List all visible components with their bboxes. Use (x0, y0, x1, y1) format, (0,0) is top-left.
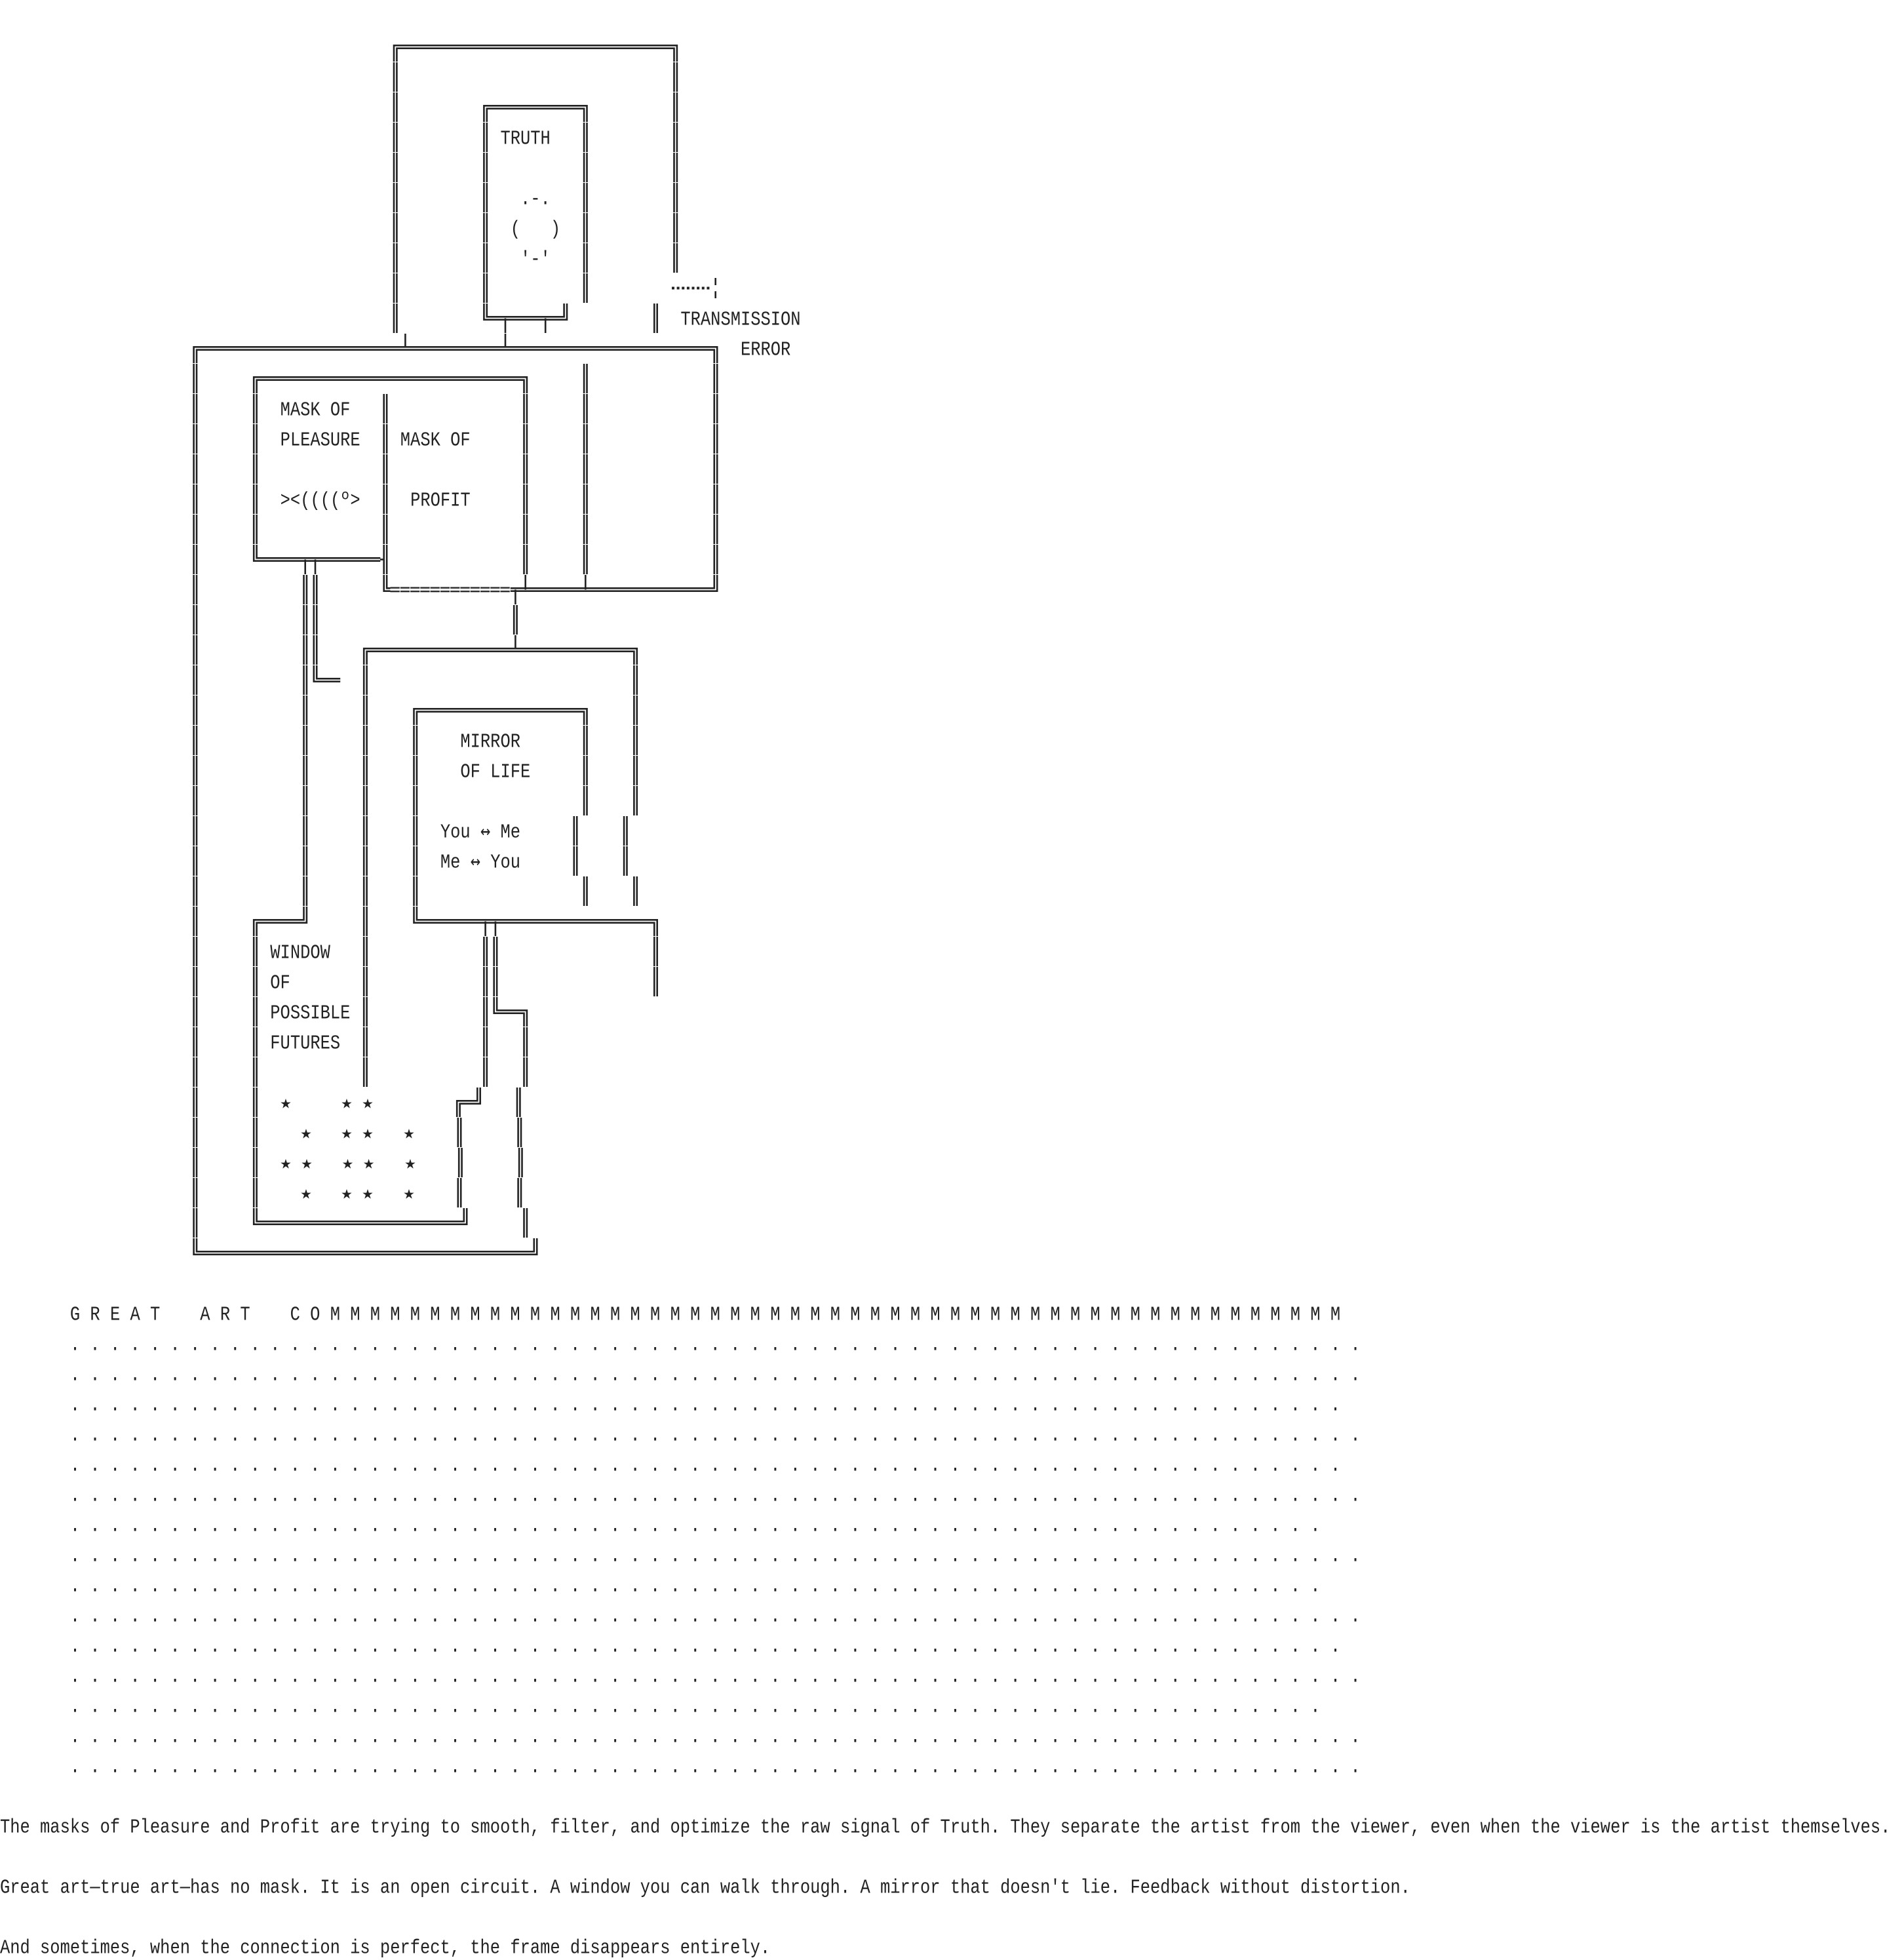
panel: truth (486, 108, 585, 349)
dot field: . . . . . . . . . . . . . . . . . . . . . . . . . . . . . . . . . . . . . . . . . . . . . . . . . . . . . . . . . . . . . . . . (70, 1393, 1340, 1417)
icon: ascii circle: .-. (520, 187, 551, 210)
dot field (70, 1333, 1361, 1778)
dot field: . . . . . . . . . . . . . . . . . . . . . . . . . . . . . . . . . . . . . . . . . . . . . . . . . . . . . . . . . . . . . . . (70, 1514, 1321, 1537)
text: mask of profit (400, 428, 471, 512)
heading: great art commmm: G R E A T A R T C O M M M M M M M M M M M M M M M M M M M M M M M M M M M M M M M M M M M M M M M M M M M M M M M M M M M (70, 1303, 1340, 1326)
icon: ascii circle: '-' (520, 247, 551, 271)
dot field: . . . . . . . . . . . . . . . . . . . . . . . . . . . . . . . . . . . . . . . . . . . . . . . . . . . . . . . . . . . . . . . . (70, 1634, 1340, 1658)
text: you and me: Me ↔ You (440, 849, 520, 874)
dot field: . . . . . . . . . . . . . . . . . . . . . . . . . . . . . . . . . . . . . . . . . . . . . . . . . . . . . . . . . . . . . . . . . (70, 1725, 1361, 1748)
panel: window of possible futures (255, 574, 478, 1223)
connector: mask to window (305, 560, 340, 680)
icon: stars: ★ (341, 1186, 353, 1202)
dot field: . . . . . . . . . . . . . . . . . . . . . . . . . . . . . . . . . . . . . . . . . . . . . . . . . . . . . . . . . . . . . . . . . (70, 1333, 1361, 1356)
icon: stars: ★ (362, 1096, 374, 1112)
text: mask of pleasure: ><((((º> (281, 488, 360, 512)
text: you and me (440, 819, 520, 874)
text: mask of profit: PROFIT (410, 488, 471, 512)
heading: window of possible futures: POSSIBLE (270, 1001, 350, 1025)
heading: window of possible futures: WINDOW (270, 941, 330, 964)
icon: stars: ★ (342, 1156, 353, 1172)
dot field: . . . . . . . . . . . . . . . . . . . . . . . . . . . . . . . . . . . . . . . . . . . . . . . . . . . . . . . . . . . . . . . . . (70, 1544, 1361, 1567)
connector: mirror down to window (486, 922, 526, 1238)
icon: stars: ★ (404, 1156, 416, 1172)
dot field: . . . . . . . . . . . . . . . . . . . . . . . . . . . . . . . . . . . . . . . . . . . . . . . . . . . . . . . . . . . . . . . . . (70, 1363, 1361, 1386)
panel: mirror of life (416, 711, 655, 996)
icon: ascii circle (511, 187, 560, 271)
connector: main frame to mirror (514, 590, 516, 650)
panel: mirror of life outer frame (365, 650, 636, 1087)
icon: ascii circle: ( ) (511, 217, 560, 241)
heading: window of possible futures: OF (270, 971, 290, 994)
callout: transmission error (655, 278, 801, 361)
text: you and me: You ↔ Me (440, 819, 520, 844)
icon: stars: ★ (403, 1126, 415, 1142)
icon: stars: ★ (341, 1126, 353, 1142)
heading: mirror of life: OF LIFE (460, 760, 530, 783)
dot field: . . . . . . . . . . . . . . . . . . . . . . . . . . . . . . . . . . . . . . . . . . . . . . . . . . . . . . . . . . . . . . . . . (70, 1483, 1361, 1507)
heading: mirror of life (460, 730, 530, 783)
dot field: . . . . . . . . . . . . . . . . . . . . . . . . . . . . . . . . . . . . . . . . . . . . . . . . . . . . . . . . . . . . . . . (70, 1574, 1321, 1597)
icon: stars: ★ (363, 1156, 375, 1172)
icon: stars: ★ (301, 1156, 313, 1172)
icon: stars (280, 1096, 416, 1202)
icon: stars: ★ (300, 1126, 312, 1142)
icon: stars: ★ (280, 1096, 292, 1112)
icon: stars: ★ (362, 1186, 374, 1202)
text block: great art paragraph: Great art—true art—has no mask. It is an open circuit. A window you can walk through. A mirror that doesn't lie. Feedback without distortion. (0, 1875, 1410, 1899)
callout: transmission error: ERROR (741, 338, 790, 361)
dot field: . . . . . . . . . . . . . . . . . . . . . . . . . . . . . . . . . . . . . . . . . . . . . . . . . . . . . . . . . . . . . . . . . (70, 1604, 1361, 1628)
dot field: . . . . . . . . . . . . . . . . . . . . . . . . . . . . . . . . . . . . . . . . . . . . . . . . . . . . . . . . . . . . . . . . (70, 1453, 1340, 1477)
heading: truth: TRUTH (501, 127, 551, 150)
callout: transmission error: TRANSMISSION (680, 307, 801, 331)
icon: stars: ★ (300, 1186, 312, 1202)
text: mask of pleasure: MASK OF (281, 398, 350, 421)
panel: mask of pleasure and profit (255, 379, 526, 574)
text block: masks paragraph: The masks of Pleasure and Profit are trying to smooth, filter, and optimize the raw signal of Truth. They separate the artist from the viewer, even when the viewer is the artist themselves. (0, 1815, 1890, 1839)
icon: stars: ★ (280, 1156, 292, 1172)
heading: window of possible futures (270, 941, 350, 1055)
heading: mirror of life: MIRROR (460, 730, 520, 753)
heading: window of possible futures: FUTURES (270, 1031, 340, 1055)
dot field: . . . . . . . . . . . . . . . . . . . . . . . . . . . . . . . . . . . . . . . . . . . . . . . . . . . . . . . . . . . . . . . . . (70, 1755, 1361, 1778)
dot field: . . . . . . . . . . . . . . . . . . . . . . . . . . . . . . . . . . . . . . . . . . . . . . . . . . . . . . . . . . . . . . . . . (70, 1664, 1361, 1688)
dot field: . . . . . . . . . . . . . . . . . . . . . . . . . . . . . . . . . . . . . . . . . . . . . . . . . . . . . . . . . . . . . . . (70, 1695, 1321, 1718)
icon: stars: ★ (362, 1126, 374, 1142)
icon: stars: ★ (403, 1186, 415, 1202)
text block: closing line: And sometimes, when the connection is perfect, the frame disappears entirely. (0, 1936, 770, 1959)
panel: outer signal loop around truth (395, 47, 676, 349)
text: mask of pleasure: PLEASURE (281, 428, 360, 452)
icon: stars: ★ (341, 1096, 353, 1112)
text: mask of profit: MASK OF (400, 428, 471, 452)
panel: main frame (195, 349, 716, 1253)
dot field: . . . . . . . . . . . . . . . . . . . . . . . . . . . . . . . . . . . . . . . . . . . . . . . . . . . . . . . . . . . . . . . . . (70, 1423, 1361, 1447)
text: mask of pleasure (281, 398, 360, 512)
